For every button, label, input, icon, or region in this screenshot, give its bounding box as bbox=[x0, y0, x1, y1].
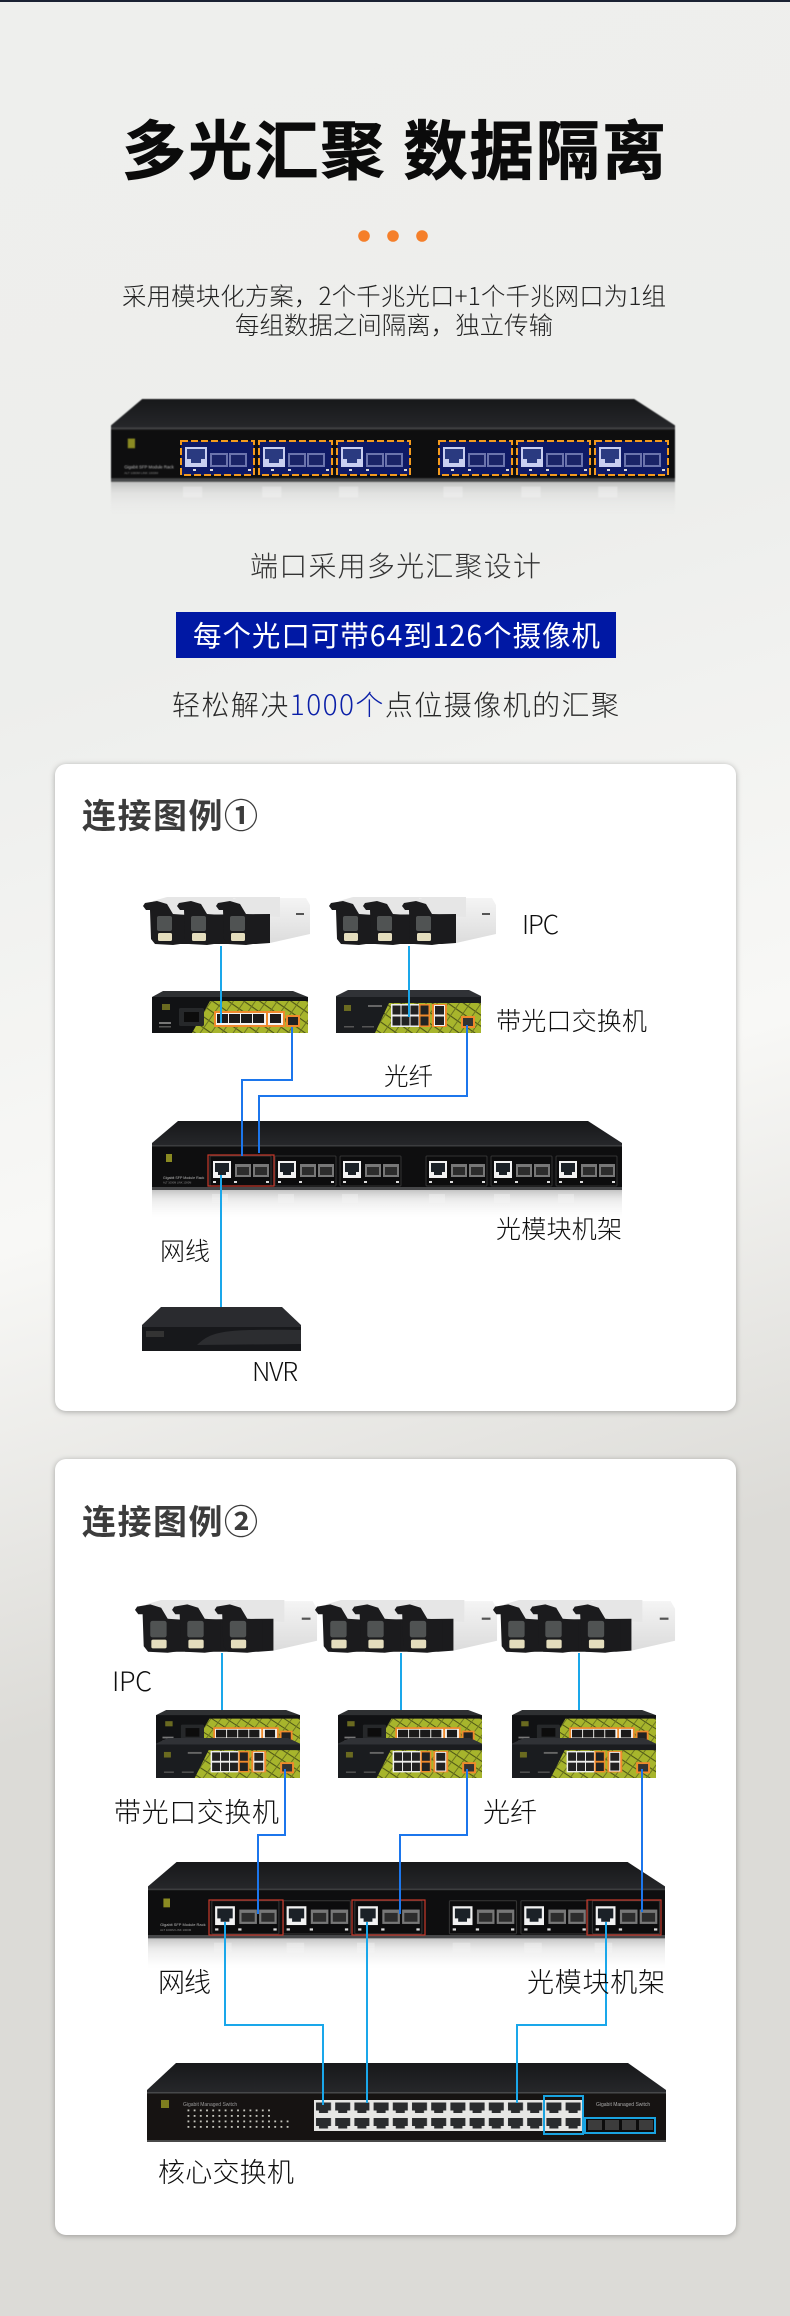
icon: NVR bbox=[142, 1307, 301, 1351]
icon: camera group left bbox=[143, 897, 310, 945]
cables: network lines bbox=[222, 1653, 606, 2105]
icon: PoE switch left bbox=[152, 991, 308, 1033]
red highlight on module bbox=[208, 1155, 274, 1186]
icon: optical module rack bbox=[152, 1121, 622, 1217]
icon: camera group right bbox=[329, 897, 496, 945]
cables: fiber lines bbox=[242, 1025, 467, 1156]
blue highlight banner: 每个光口可带64到126个摄像机 bbox=[193, 614, 600, 655]
icon: core switch: Gigabit Managed Switch bbox=[183, 2102, 237, 2108]
product image: optical module rack with highlighted port groups bbox=[111, 399, 675, 514]
label: module rack: 光模块机架 bbox=[527, 1961, 665, 2000]
label: NVR: NVR bbox=[252, 1352, 298, 1389]
red highlights on modules bbox=[209, 1900, 661, 1935]
icon: camera group 2 bbox=[315, 1600, 497, 1653]
label: IPC: IPC bbox=[112, 1660, 152, 1699]
caption: port design: 端口采用多光汇聚设计 bbox=[250, 545, 541, 585]
label: switch with fiber port: 带光口交换机 bbox=[496, 1002, 647, 1038]
icon: stacked switches 2 bbox=[338, 1710, 482, 1778]
icon: camera group 3 bbox=[493, 1600, 675, 1653]
label: network cable: 网线 bbox=[160, 1232, 210, 1268]
icon: optical module rack bbox=[148, 1862, 665, 1968]
icon: camera group 1 bbox=[135, 1600, 317, 1653]
intro text: 采用模块化方案，2个千兆光口+1个千兆网口为1组 bbox=[122, 278, 666, 313]
intro text bbox=[122, 278, 666, 342]
intro text: 每组数据之间隔离，独立传输 bbox=[235, 307, 553, 342]
label: fiber: 光纤 bbox=[384, 1058, 433, 1093]
icon: core switch: Gigabit Managed Switch bbox=[596, 2102, 650, 2108]
cables: network lines bbox=[221, 946, 409, 1307]
panel: connection diagram 2 bbox=[55, 1459, 736, 2235]
icon: stacked switches 1 bbox=[156, 1710, 300, 1778]
three orange dots bbox=[358, 230, 428, 242]
label: module rack: 光模块机架 bbox=[496, 1210, 622, 1246]
heading: diagram 1: 连接图例① bbox=[82, 789, 258, 838]
title: 多光汇聚 数据隔离 bbox=[122, 101, 666, 193]
icon: PoE switch right bbox=[336, 990, 481, 1033]
heading: diagram 2: 连接图例② bbox=[82, 1495, 258, 1544]
label: switch with fiber port: 带光口交换机 bbox=[114, 1791, 279, 1830]
label: fiber: 光纤 bbox=[483, 1791, 537, 1830]
label: core switch: 核心交换机 bbox=[158, 2151, 294, 2190]
label: network cable: 网线 bbox=[158, 1961, 211, 2000]
cables: fiber lines bbox=[258, 1769, 642, 1914]
label: IPC: IPC bbox=[522, 905, 559, 942]
icon: core switch bbox=[147, 2063, 666, 2142]
caption: 1000 camera points: 轻松解决1000个点位摄像机的汇聚 bbox=[172, 684, 619, 724]
panel: connection diagram 1 bbox=[55, 764, 736, 1411]
icon: stacked switches 3 bbox=[512, 1710, 656, 1778]
